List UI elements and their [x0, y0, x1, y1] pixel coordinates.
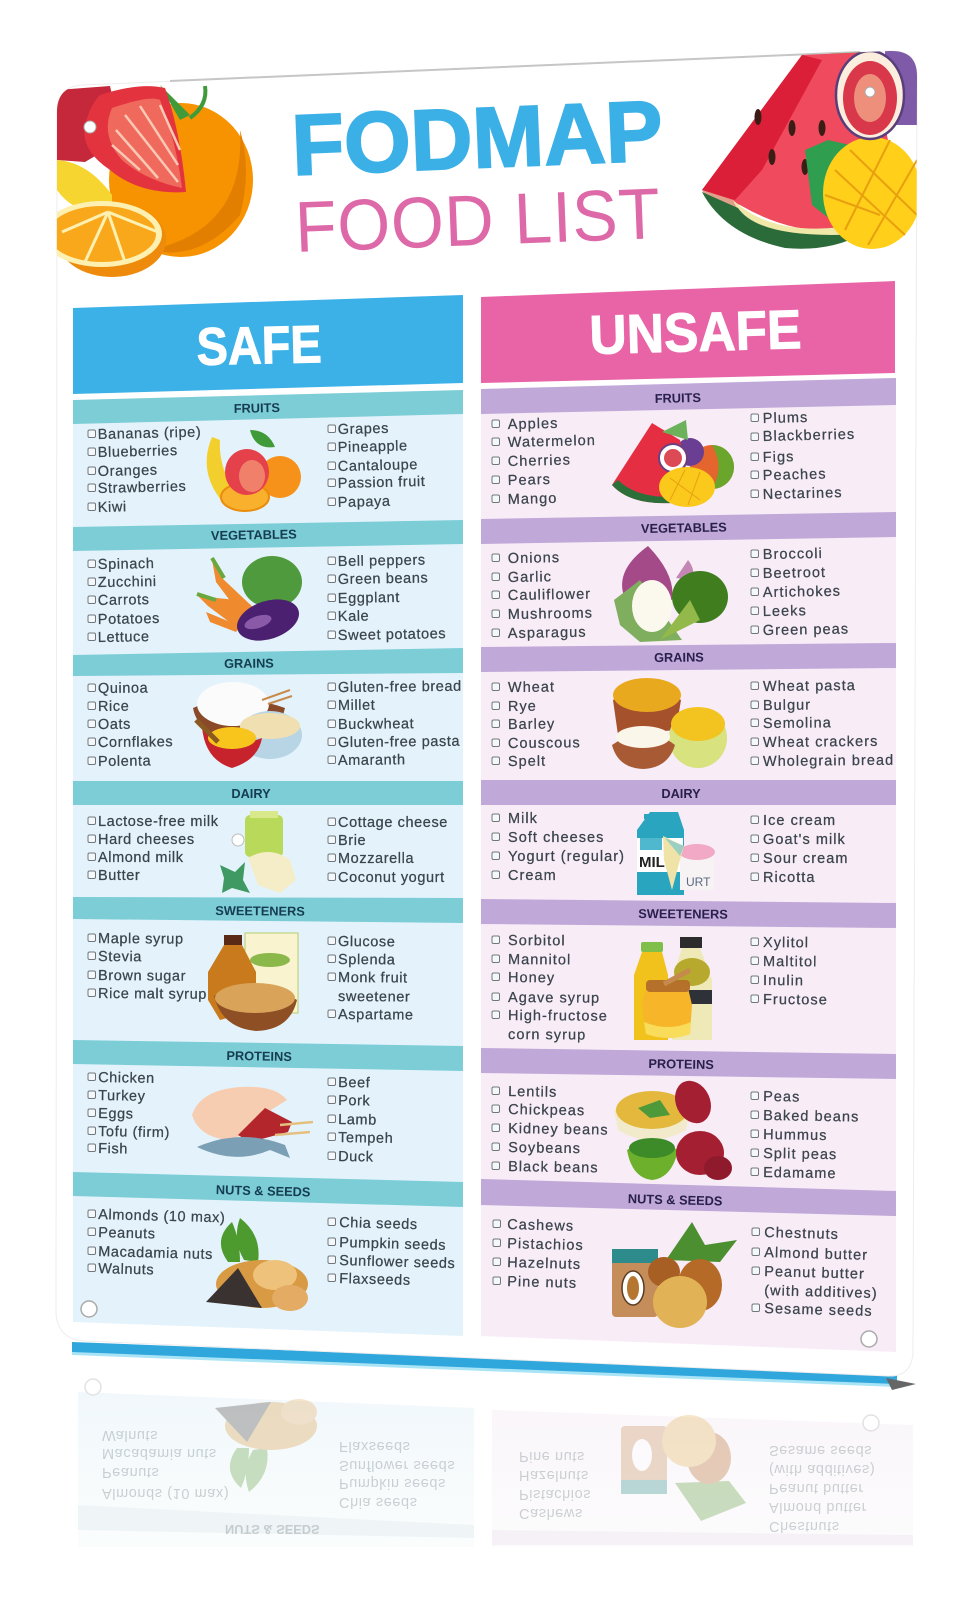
list: safe dairy left: Lactose-free milk: [98, 814, 219, 830]
list: unsafe fruits left: Apples: [508, 416, 559, 433]
list: unsafe proteins right: Edamame: [763, 1165, 837, 1182]
heading: dairy: DAIRY: [231, 786, 271, 801]
list: unsafe grains left: Spelt: [508, 754, 546, 770]
heading: vegetables: VEGETABLES: [211, 526, 297, 543]
icon: grain bowls: [612, 678, 727, 769]
icon: watermelon, fig, mango: [612, 420, 734, 507]
sign board: [56, 51, 917, 1376]
reflected unsafe nuts list: Peanut butter: [769, 1480, 864, 1496]
list: unsafe grains right: Wheat crackers: [763, 734, 878, 751]
section: unsafe grains: [481, 643, 896, 770]
heading: nuts and seeds: NUTS & SEEDS: [216, 1182, 311, 1199]
list: safe fruits right: Cantaloupe: [338, 457, 418, 475]
reflected unsafe nuts list: Sesame seeds: [769, 1442, 872, 1458]
list: unsafe grains right: Semolina: [763, 715, 832, 732]
list: safe grains left: Rice: [98, 699, 129, 715]
list: safe vegetables left: Carrots: [98, 592, 150, 609]
list: unsafe nuts left: Pistachios: [507, 1236, 584, 1254]
list: unsafe fruits right: Peaches: [763, 466, 827, 484]
list: unsafe nuts right: Sesame seeds: [764, 1301, 873, 1320]
list: unsafe dairy left: Soft cheeses: [508, 830, 604, 846]
list: unsafe dairy left: Cream: [508, 868, 557, 884]
reflected safe nuts list: Pumpkin seeds: [339, 1475, 446, 1491]
list: safe sweeteners left: Stevia: [98, 949, 142, 965]
list: safe nuts left: Walnuts: [98, 1261, 154, 1278]
heading: proteins: PROTEINS: [648, 1056, 714, 1072]
list: safe sweeteners right: Glucose: [338, 934, 396, 950]
heading: fruits: FRUITS: [234, 400, 281, 416]
title: [290, 83, 664, 267]
banner: UNSAFE: [481, 281, 895, 383]
list: unsafe proteins left: [492, 1084, 609, 1176]
list: safe grains right: Amaranth: [338, 752, 406, 769]
list: unsafe nuts right: Chestnuts: [764, 1225, 839, 1243]
list: unsafe sweeteners left: Sorbitol: [508, 933, 566, 949]
list: unsafe vegetables left: Mushrooms: [508, 606, 593, 623]
section: safe dairy: [73, 781, 463, 893]
list: safe dairy right: Brie: [338, 833, 366, 849]
list: unsafe fruits right: Plums: [763, 410, 809, 427]
list: unsafe dairy left: [492, 811, 625, 884]
section: safe nuts and seeds: [73, 1172, 463, 1311]
icon: lentil soup, peas, kidney beans: [614, 1075, 732, 1180]
list: safe nuts right: Chia seeds: [339, 1215, 418, 1233]
reflected safe nuts list: Flaxseeds: [339, 1438, 410, 1454]
list: unsafe grains right: Wheat pasta: [763, 678, 856, 695]
list: unsafe fruits left: Mango: [508, 491, 558, 508]
list: unsafe grains right: [751, 678, 894, 770]
section: safe grains: [73, 648, 463, 770]
list: safe vegetables left: Spinach: [98, 556, 155, 573]
list: unsafe vegetables right: Green peas: [763, 621, 849, 639]
section: safe sweeteners: [73, 897, 463, 1031]
list: unsafe vegetables right: [751, 546, 849, 639]
list: unsafe nuts left: Cashews: [507, 1217, 574, 1235]
banner: UNSAFE: UNSAFE: [589, 298, 802, 366]
list: unsafe vegetables right: Leeks: [763, 603, 807, 620]
heading: dairy: DAIRY: [661, 786, 701, 801]
list: unsafe proteins right: [751, 1089, 859, 1182]
list: unsafe sweeteners right: [751, 935, 828, 1008]
list: safe nuts left: Macadamia nuts: [98, 1244, 213, 1263]
heading: proteins: PROTEINS: [226, 1048, 292, 1064]
banner: SAFE: SAFE: [196, 315, 322, 377]
list: safe dairy right: Cottage cheese: [338, 815, 448, 831]
reflected unsafe nuts list: Chestnuts: [769, 1518, 840, 1534]
list: unsafe grains left: Rye: [508, 699, 537, 715]
title line: FODMAP: FODMAP: [290, 83, 664, 194]
list: safe nuts right: [328, 1215, 456, 1289]
list: unsafe grains left: Couscous: [508, 735, 581, 752]
list: unsafe vegetables right: Broccoli: [763, 546, 823, 563]
list: safe dairy left: Butter: [98, 868, 140, 884]
list: unsafe nuts right: Almond butter: [764, 1245, 868, 1264]
list: safe proteins right: Pork: [338, 1093, 371, 1110]
list: safe dairy right: Coconut yogurt: [338, 870, 445, 886]
list: unsafe vegetables left: [492, 550, 593, 642]
list: unsafe dairy right: Goat's milk: [763, 832, 846, 848]
illustration: header fruit right: [702, 50, 921, 249]
list: safe grains left: Quinoa: [98, 680, 149, 697]
section: unsafe proteins: [481, 1048, 896, 1182]
list: safe vegetables left: Zucchini: [98, 574, 157, 591]
list: unsafe nuts right: [752, 1225, 878, 1320]
list: safe sweeteners left: [88, 931, 207, 1003]
list: safe dairy right: Mozzarella: [338, 851, 414, 867]
list: unsafe fruits left: Watermelon: [508, 433, 596, 451]
list: unsafe fruits right: Nectarines: [763, 485, 843, 503]
list: safe vegetables right: [328, 552, 446, 644]
icon: onion, cauliflower, broccoli: [614, 546, 728, 642]
reflected safe nuts list: [102, 1427, 455, 1537]
section: unsafe fruits: [481, 378, 896, 508]
list: safe nuts right: Sunflower seeds: [339, 1253, 456, 1272]
list: unsafe fruits left: Pears: [508, 472, 551, 489]
list: safe dairy left: Hard cheeses: [98, 832, 195, 848]
list: unsafe fruits left: [492, 416, 596, 508]
icon: rice, polenta and oats bowls: [193, 682, 302, 768]
list: safe grains right: Buckwheat: [338, 716, 414, 733]
list: unsafe sweeteners left: Agave syrup: [508, 990, 600, 1007]
reflected unsafe nuts list: Pine nuts: [519, 1448, 585, 1464]
list: safe sweeteners right: sweetener: [338, 989, 410, 1006]
section: unsafe vegetables: [481, 512, 896, 642]
list: unsafe sweeteners left: Honey: [508, 970, 555, 986]
list: safe vegetables left: Lettuce: [98, 629, 150, 646]
panel: safe column: [73, 295, 463, 1336]
list: safe dairy right: [328, 815, 448, 886]
list: unsafe dairy left: Milk: [508, 811, 538, 827]
reflected unsafe nuts list: Cashews: [519, 1505, 583, 1521]
list: safe grains left: Cornflakes: [98, 734, 173, 751]
list: unsafe sweeteners right: Maltitol: [763, 954, 817, 970]
section: safe fruits: [73, 390, 463, 516]
icon: banana, strawberry, orange: [207, 430, 301, 511]
reflected unsafe nuts list: Hazelnuts: [519, 1467, 589, 1483]
list: unsafe dairy right: [751, 813, 848, 886]
list: safe sweeteners left: Maple syrup: [98, 931, 184, 948]
list: safe fruits left: Strawberries: [98, 479, 187, 497]
reflected unsafe nuts list: Almond butter: [769, 1499, 867, 1515]
list: safe proteins left: Chicken: [98, 1070, 155, 1087]
list: safe fruits right: Passion fruit: [338, 474, 426, 492]
list: safe fruits left: Kiwi: [98, 499, 127, 516]
list: unsafe sweeteners left: High-fructose: [508, 1008, 608, 1025]
list: safe sweeteners right: Monk fruit: [338, 970, 408, 986]
list: unsafe grains left: [492, 680, 581, 770]
list: safe vegetables right: Eggplant: [338, 590, 400, 607]
heading: sweeteners: SWEETENERS: [215, 903, 305, 919]
list: safe fruits left: Blueberries: [98, 443, 178, 461]
list: unsafe sweeteners left: corn syrup: [508, 1027, 586, 1044]
heading: grains: GRAINS: [654, 649, 704, 665]
list: unsafe grains right: Wholegrain bread: [763, 753, 894, 770]
list: safe sweeteners right: Splenda: [338, 952, 396, 968]
list: unsafe grains right: Bulgur: [763, 697, 811, 714]
list: unsafe vegetables right: Beetroot: [763, 565, 826, 582]
reflected nut icons: [215, 1399, 746, 1521]
reflected safe nuts list: Walnuts: [102, 1427, 158, 1443]
list: safe sweeteners left: Brown sugar: [98, 968, 186, 985]
heading: sweeteners: SWEETENERS: [638, 906, 728, 922]
list: unsafe vegetables left: Onions: [508, 550, 560, 567]
heading: fruits: FRUITS: [655, 390, 702, 406]
icon: milk carton, ice cream, yogurt: [637, 812, 715, 895]
icon: maple syrup, stevia, sugar bowl: [208, 933, 298, 1031]
list: safe vegetables right: Sweet potatoes: [338, 626, 446, 644]
list: unsafe vegetables right: Artichokes: [763, 584, 841, 601]
list: safe fruits left: Bananas (ripe): [98, 424, 201, 443]
list: unsafe fruits right: Figs: [763, 449, 795, 466]
list: safe nuts left: Peanuts: [98, 1225, 156, 1243]
list: unsafe sweeteners right: Inulin: [763, 973, 804, 989]
icon: seeds and nuts: [206, 1218, 308, 1311]
list: safe dairy left: [88, 814, 219, 884]
list: safe proteins left: Tofu (firm): [98, 1124, 170, 1141]
list: unsafe proteins right: Hummus: [763, 1127, 828, 1144]
reflection of the sign: [78, 1379, 913, 1547]
list: safe vegetables right: Green beans: [338, 570, 428, 588]
list: safe proteins left: [88, 1070, 170, 1157]
panel: unsafe column: [481, 281, 896, 1352]
list: safe proteins right: Beef: [338, 1075, 371, 1092]
section: unsafe nuts and seeds: [481, 1179, 896, 1328]
icon: nut butter jar and nuts: [612, 1222, 737, 1328]
list: safe vegetables left: Potatoes: [98, 611, 160, 628]
reflected unsafe nuts list: (with additives): [769, 1461, 875, 1477]
list: unsafe proteins left: Kidney beans: [508, 1121, 609, 1139]
list: safe grains left: Oats: [98, 717, 131, 733]
icon: milk carton, ice cream, yogurt: MIL: [639, 854, 665, 871]
icon: milk carton, ice cream, yogurt: URT: [686, 875, 711, 889]
section: unsafe dairy: [481, 780, 896, 895]
reflected safe nuts list: Chia seeds: [339, 1494, 418, 1510]
list: safe proteins left: Eggs: [98, 1106, 134, 1123]
heading: nuts and seeds: NUTS & SEEDS: [628, 1191, 723, 1208]
list: unsafe proteins right: Baked beans: [763, 1108, 859, 1126]
list: safe vegetables right: Bell peppers: [338, 552, 426, 570]
list: unsafe proteins left: Lentils: [508, 1084, 558, 1101]
reflected unsafe nuts list: [519, 1442, 875, 1534]
list: safe grains right: Gluten-free bread: [338, 679, 462, 696]
list: unsafe fruits left: Cherries: [508, 452, 571, 470]
list: unsafe proteins left: Soybeans: [508, 1140, 581, 1157]
list: safe nuts left: [88, 1207, 226, 1278]
icon: chicken, meat, fish: [192, 1087, 313, 1158]
list: safe nuts right: Flaxseeds: [339, 1271, 411, 1289]
list: safe proteins right: Duck: [338, 1149, 374, 1166]
list: unsafe dairy right: Ricotta: [763, 870, 815, 886]
section: unsafe sweeteners: [481, 899, 896, 1044]
list: unsafe dairy left: Yogurt (regular): [508, 849, 625, 865]
list: safe fruits left: [88, 424, 201, 516]
list: unsafe sweeteners right: Xylitol: [763, 935, 809, 951]
list: unsafe fruits right: Blackberries: [763, 427, 855, 445]
list: safe sweeteners right: Aspartame: [338, 1007, 414, 1024]
heading: vegetables: VEGETABLES: [641, 519, 727, 536]
list: safe grains right: Millet: [338, 698, 375, 714]
mounting hole: bottom left: [81, 1301, 97, 1317]
icon: syrup bottles and honey jar: [634, 937, 712, 1040]
list: safe grains left: Polenta: [98, 753, 152, 770]
list: unsafe nuts right: (with additives): [764, 1283, 878, 1302]
heading: grains: GRAINS: [224, 655, 274, 671]
list: unsafe nuts left: Pine nuts: [507, 1274, 577, 1292]
list: safe fruits right: [328, 421, 426, 511]
list: safe nuts left: Almonds (10 max): [98, 1207, 226, 1226]
list: unsafe nuts left: Hazelnuts: [507, 1255, 581, 1273]
list: unsafe grains left: Wheat: [508, 680, 555, 696]
list: unsafe fruits right: [751, 410, 855, 503]
list: safe vegetables left: [88, 556, 160, 646]
list: unsafe dairy right: Ice cream: [763, 813, 836, 829]
list: unsafe proteins left: Chickpeas: [508, 1102, 585, 1119]
list: safe fruits right: Grapes: [338, 421, 389, 438]
reflected unsafe nuts list: Pistachios: [519, 1486, 591, 1502]
reflected safe nuts list: Almonds (10 max): [102, 1485, 229, 1501]
list: safe grains right: [328, 679, 462, 769]
list: safe dairy left: Almond milk: [98, 850, 184, 866]
list: unsafe proteins right: Peas: [763, 1089, 800, 1106]
list: unsafe nuts left: [493, 1217, 584, 1292]
list: safe proteins right: Tempeh: [338, 1130, 393, 1147]
list: unsafe vegetables left: Asparagus: [508, 625, 587, 642]
reflected safe nuts list: NUTS & SEEDS: [225, 1522, 320, 1537]
list: unsafe sweeteners left: [492, 933, 608, 1044]
list: unsafe vegetables left: Garlic: [508, 569, 552, 586]
list: unsafe proteins right: Split peas: [763, 1146, 837, 1163]
section: safe proteins: [73, 1040, 463, 1166]
list: safe grains right: Gluten-free pasta: [338, 734, 461, 751]
list: safe proteins right: [328, 1075, 393, 1166]
list: safe fruits right: Pineapple: [338, 438, 408, 456]
list: safe vegetables right: Kale: [338, 608, 369, 625]
list: safe proteins right: Lamb: [338, 1112, 377, 1129]
mounting hole: bottom right: [861, 1331, 877, 1347]
list: unsafe sweeteners left: Mannitol: [508, 952, 571, 968]
list: safe proteins left: Turkey: [98, 1088, 146, 1105]
list: unsafe vegetables left: Cauliflower: [508, 587, 591, 604]
icon: almond milk, cheese, mint: [220, 811, 296, 893]
title line: FOOD LIST: FOOD LIST: [294, 173, 661, 267]
section: safe vegetables: [73, 520, 463, 648]
reflected safe nuts list: Macadamia nuts: [102, 1445, 217, 1461]
list: unsafe nuts right: Peanut butter: [764, 1264, 865, 1283]
illustration: header fruit left: [42, 85, 253, 277]
blue edge of the metal sign: [72, 1342, 916, 1390]
list: unsafe proteins left: Black beans: [508, 1159, 599, 1176]
reflected safe nuts list: Peanuts: [102, 1464, 159, 1480]
list: safe proteins left: Fish: [98, 1141, 128, 1157]
list: safe nuts right: Pumpkin seeds: [339, 1235, 446, 1254]
list: safe sweeteners left: Rice malt syrup: [98, 986, 207, 1003]
icon: carrots, greens, eggplant: [197, 556, 304, 648]
reflected safe nuts list: Sunflower seeds: [339, 1457, 455, 1473]
list: safe fruits left: Oranges: [98, 463, 158, 480]
list: unsafe sweeteners right: Fructose: [763, 992, 828, 1008]
list: safe sweeteners right: [328, 934, 414, 1024]
list: unsafe grains left: Barley: [508, 717, 555, 733]
banner: SAFE: [73, 295, 463, 394]
list: safe grains left: [88, 680, 173, 770]
list: safe fruits right: Papaya: [338, 494, 391, 511]
list: unsafe dairy right: Sour cream: [763, 851, 848, 867]
